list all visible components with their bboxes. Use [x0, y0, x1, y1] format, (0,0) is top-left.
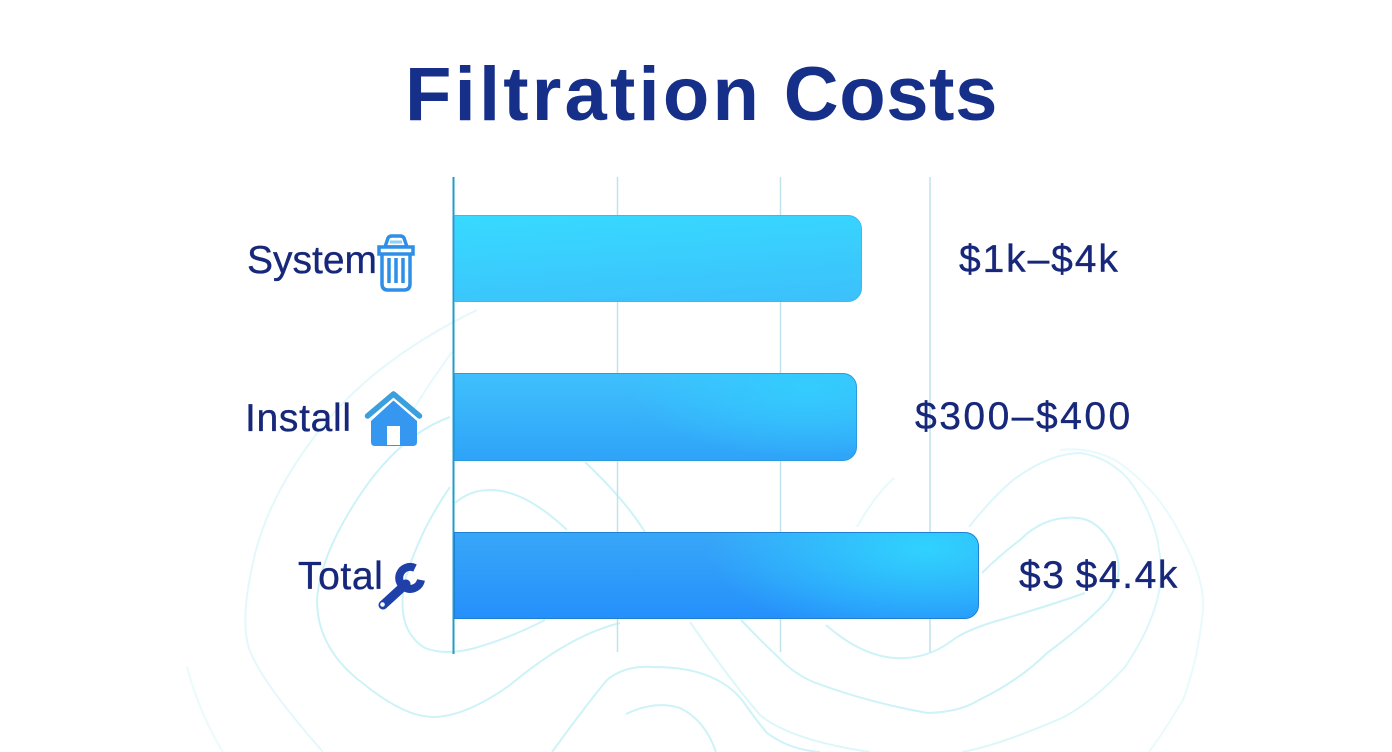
label: system: System	[247, 239, 377, 282]
label: install: Install	[245, 397, 352, 440]
icon: wrench	[378, 562, 425, 610]
bar: total	[454, 532, 979, 619]
icon: house	[364, 391, 422, 446]
value: install: $300–$400	[915, 395, 1133, 438]
title: Filtration Costs	[405, 52, 998, 137]
value: system: $1k–$4k	[959, 238, 1120, 281]
label: total: Total	[298, 555, 383, 598]
icon: trash can	[377, 234, 415, 292]
value: total: $3 $4.4k	[1019, 554, 1179, 597]
bar: system	[454, 215, 862, 302]
bar: install	[454, 373, 857, 461]
